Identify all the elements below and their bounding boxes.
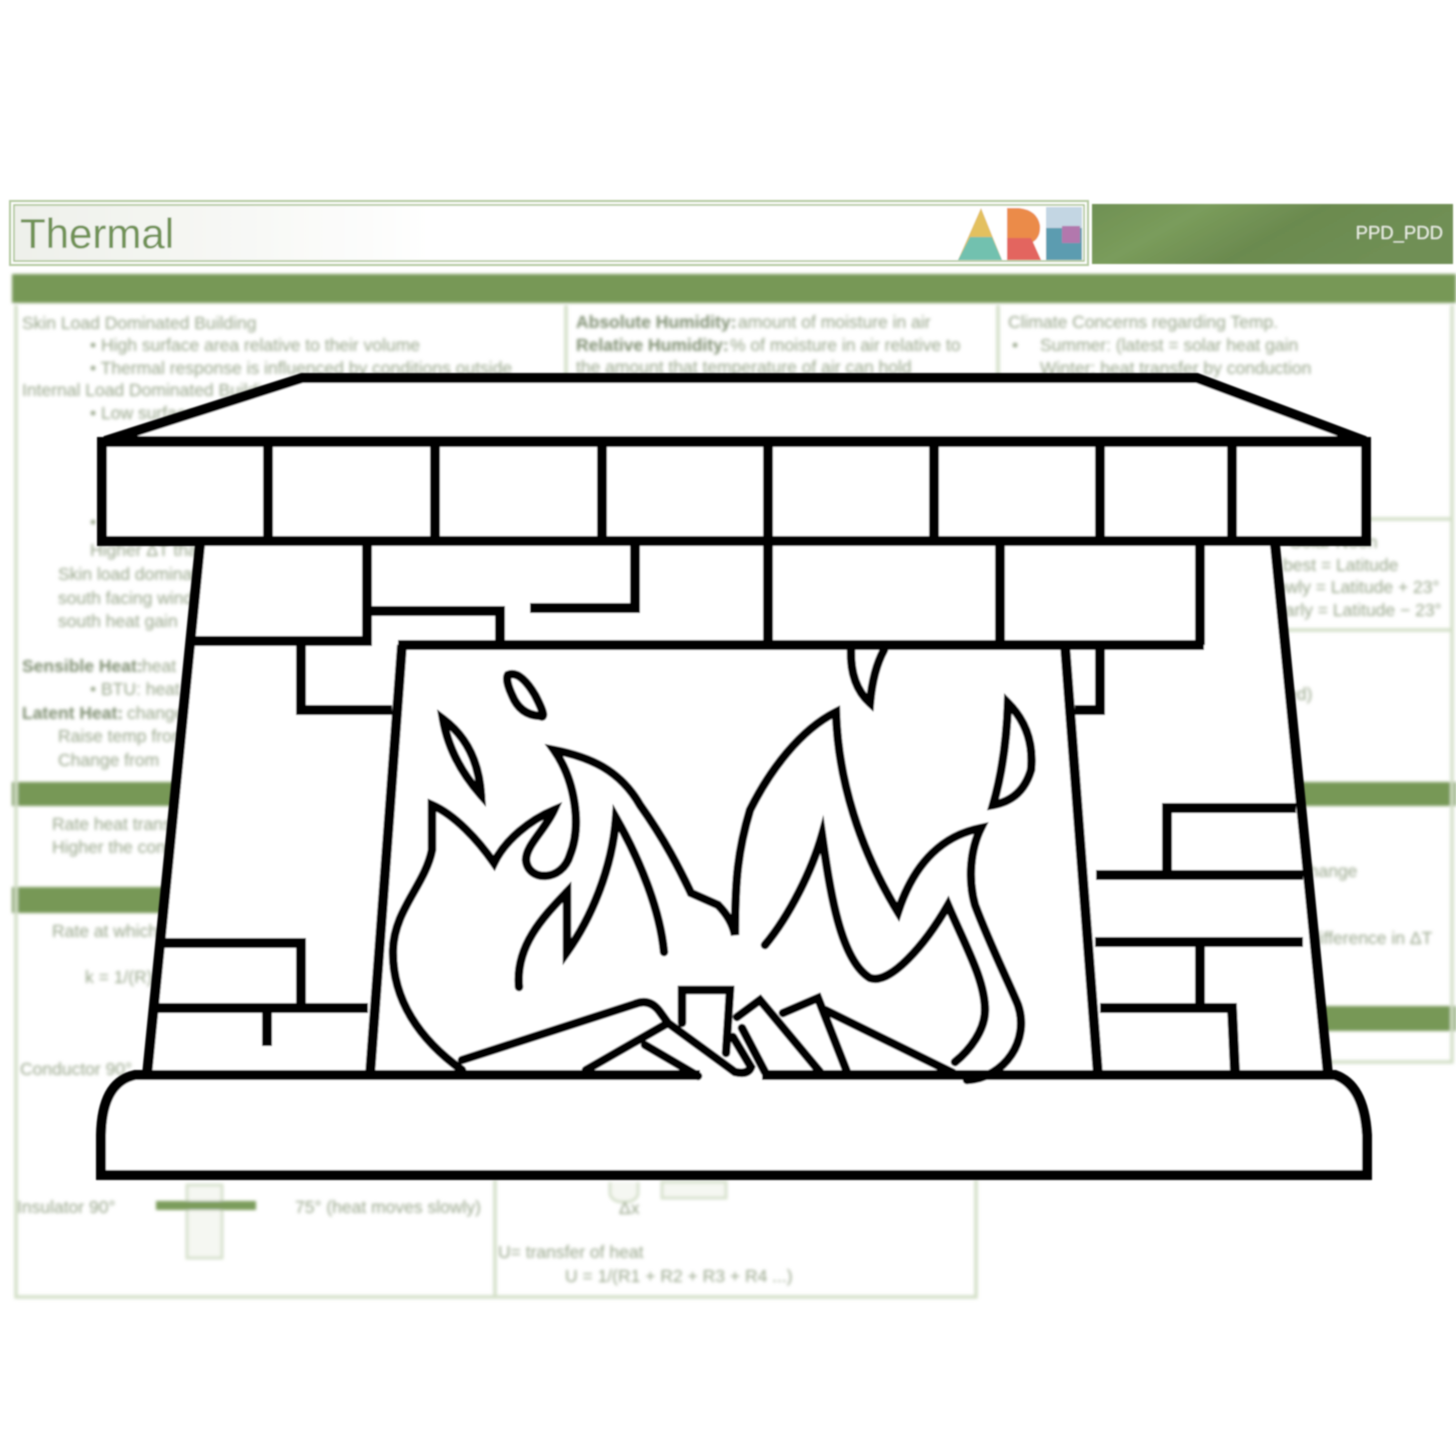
text: climate column: Solar Noon xyxy=(1290,532,1378,552)
panel borders xyxy=(16,305,1452,1297)
text: humidity column: amount of moisture in air xyxy=(738,312,931,332)
text: humidity column xyxy=(576,312,961,377)
log pile xyxy=(462,990,953,1076)
code box xyxy=(1092,204,1453,264)
text: skin and internal load column: • Low surface area xyxy=(90,403,235,423)
title box xyxy=(10,201,1088,265)
text: skin and internal load column: Internal Load Dominated Building xyxy=(22,380,281,400)
flame: main outline xyxy=(393,712,1021,1080)
text: skin and internal load column: Insulator 90° xyxy=(17,1197,115,1217)
text: skin and internal load column: Rate heat transfer xyxy=(52,814,192,834)
conductivity diagram and formula: U= transfer of heat xyxy=(498,1242,644,1262)
text: skin and internal load column: south heat gain xyxy=(58,611,178,631)
section band: lower right xyxy=(1300,1006,1456,1031)
flame: inner left xyxy=(519,818,664,987)
text: climate column: lowly = Latitude + 23° xyxy=(1272,577,1440,597)
wall bricks: left side xyxy=(155,645,392,1046)
ember: left xyxy=(443,719,481,795)
text: climate column: Climate Concerns regarding Temp. xyxy=(1008,312,1278,332)
title background xyxy=(14,205,1084,261)
mantel bricks xyxy=(102,442,1366,541)
text: climate column xyxy=(1008,312,1442,948)
text: skin and internal load column: change xyxy=(127,703,184,723)
text: climate column: difference in ΔT xyxy=(1310,928,1433,948)
text: climate column: • xyxy=(1012,335,1018,355)
code label: PPD_PDD xyxy=(1356,222,1443,244)
blurred background sheet xyxy=(12,274,1456,1297)
text: climate column: change xyxy=(1300,861,1357,881)
text: humidity column: Relative Humidity: xyxy=(576,335,729,355)
text: skin and internal load column: • Heat xyxy=(90,512,138,532)
text: skin and internal load column: Latent Heat: xyxy=(22,703,123,723)
text: skin and internal load column: • Thermal response is influenced by conditions outside xyxy=(90,358,512,378)
ember: right xyxy=(993,703,1032,805)
logo: ARE xyxy=(958,207,1082,260)
conductivity diagram and formula: U = 1/(R1 + R2 + R3 + R4 ...) xyxy=(565,1266,793,1286)
text: climate column: Summer: (latest = solar heat gain xyxy=(1040,335,1298,355)
text: climate column: Winter: heat transfer by conduction xyxy=(1040,358,1311,378)
text: skin and internal load column: Higher ΔT than xyxy=(90,540,207,560)
page header xyxy=(10,201,1453,265)
text: skin and internal load column: Skin load dominated xyxy=(58,564,217,584)
text: climate column: early = Latitude − 23° xyxy=(1275,600,1442,620)
text: skin and internal load column: 75° (heat moves slowly) xyxy=(295,1197,481,1217)
ember: top xyxy=(851,650,884,703)
text: skin and internal load column: heat xyxy=(142,656,176,676)
hearth outline xyxy=(101,1075,1367,1175)
text: skin and internal load column: Rate at which xyxy=(52,921,158,941)
title: Thermal xyxy=(20,210,174,257)
fireplace body xyxy=(147,541,1328,1075)
hearth base xyxy=(100,1075,1368,1175)
text: skin and internal load column: • High surface area relative to their volume xyxy=(90,335,420,355)
ember: top left xyxy=(507,674,543,717)
text: humidity column: % of moisture in air relative to xyxy=(730,335,961,355)
text: skin and internal load column: k = 1/(R) xyxy=(85,967,153,987)
text: skin and internal load column: Raise temp from xyxy=(58,726,186,746)
section band: top xyxy=(12,274,1456,303)
text: skin and internal load column xyxy=(17,313,512,1217)
text: skin and internal load column: Higher the conductivity xyxy=(52,837,229,857)
flame: inner right xyxy=(765,835,985,1062)
text: skin and internal load column: Skin Load Dominated Building xyxy=(22,313,256,333)
conductivity diagram and formula xyxy=(498,1182,793,1286)
fire opening xyxy=(370,645,1098,1075)
section band: middle left and right xyxy=(12,782,1456,806)
text: skin and internal load column: south facing windows xyxy=(58,588,225,608)
text: humidity column: Absolute Humidity: xyxy=(576,312,736,332)
text: skin and internal load column: Sensible Heat: xyxy=(22,656,143,676)
text: climate column: best = Latitude xyxy=(1283,555,1398,575)
section band: lower left xyxy=(12,887,212,913)
wall bricks: upper row xyxy=(194,545,1204,645)
text: skin and internal load column: Conductor 90° xyxy=(20,1059,132,1079)
conductivity diagram and formula: Δx xyxy=(619,1198,640,1218)
text: humidity column: the amount that temperature of air can hold xyxy=(576,357,912,377)
text: skin and internal load column: • BTU: heat xyxy=(90,679,180,699)
icon: fireplace xyxy=(100,378,1368,1175)
insulator diagram xyxy=(156,1185,256,1258)
text: climate column: heated) xyxy=(1253,684,1312,704)
wall bricks: right side xyxy=(1075,650,1303,1072)
mantel top xyxy=(105,378,1365,441)
text: skin and internal load column: Change from xyxy=(58,750,159,770)
